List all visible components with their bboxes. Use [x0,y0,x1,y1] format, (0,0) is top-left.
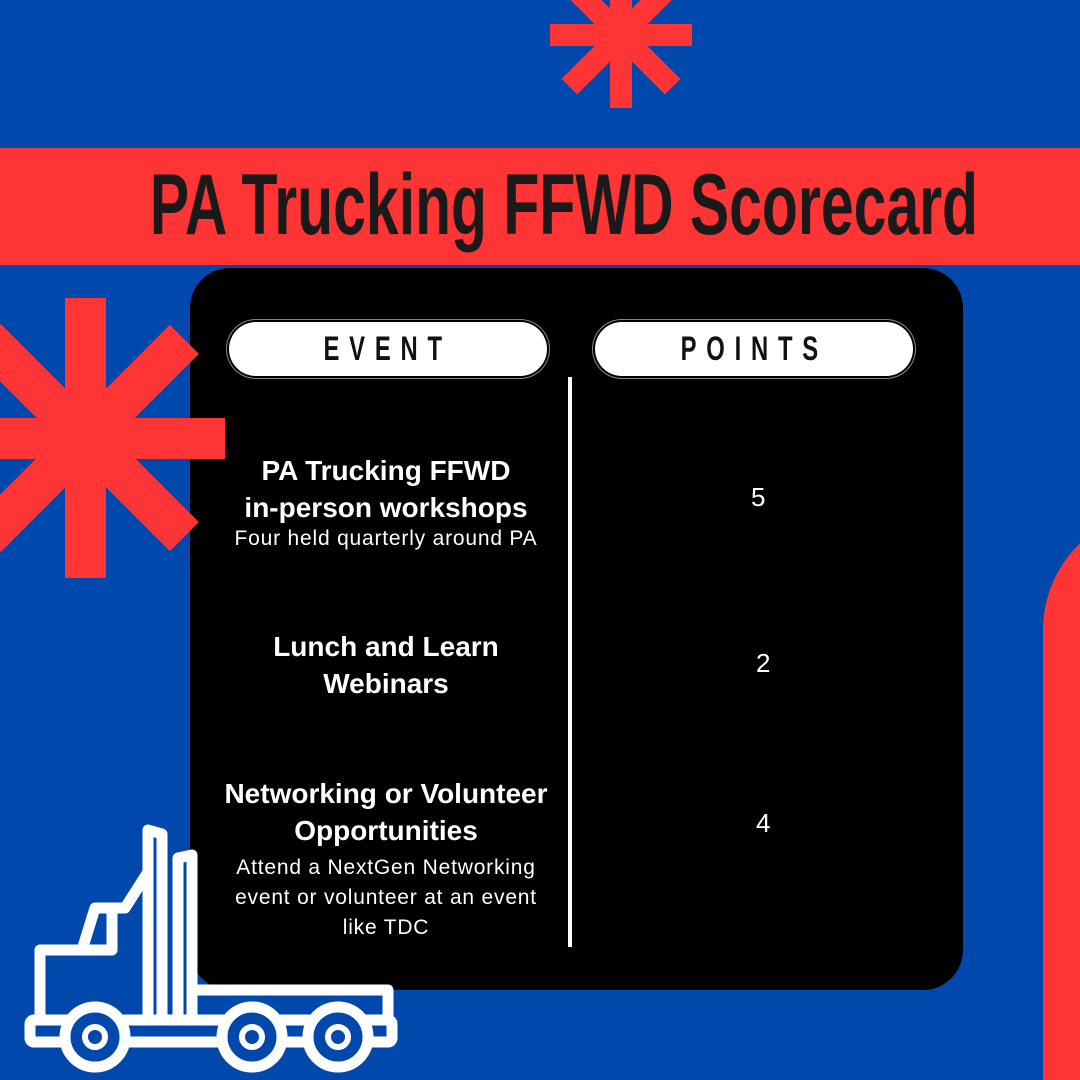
row 3 event: event or volunteer at an event [235,886,537,909]
row 1 event: in-person workshops [244,492,528,523]
row 1 event: PA Trucking FFWD [262,455,510,486]
row 2 event [273,631,499,699]
row 1 event: Four held quarterly around PA [235,527,537,550]
title banner: PA Trucking FFWD Scorecard [150,157,978,253]
header: points: POINTS [680,330,828,368]
decoration: left asterisk [0,298,225,578]
row 1 points: 5 [751,482,765,512]
row 2 event: Lunch and Learn [273,631,499,662]
icon: truck [24,824,398,1072]
row 3 event: like TDC [343,916,429,939]
row 3 event: Networking or Volunteer [224,778,548,809]
row 3 points: 4 [756,808,770,838]
title banner [0,148,1080,265]
row 2 event: Webinars [323,668,449,699]
row 3 event [224,778,548,939]
header: event: EVENT [324,330,452,368]
row 2 points: 2 [756,648,770,678]
decoration: top asterisk [550,0,692,108]
row 1 event [235,455,537,550]
column divider [568,377,572,947]
decoration: right red arch [1043,510,1080,1080]
row 3 event: Opportunities [294,815,478,846]
panel: scorecard table [190,268,963,990]
header: event [229,322,547,376]
row 3 event: Attend a NextGen Networking [236,856,536,879]
header: points [595,322,913,376]
